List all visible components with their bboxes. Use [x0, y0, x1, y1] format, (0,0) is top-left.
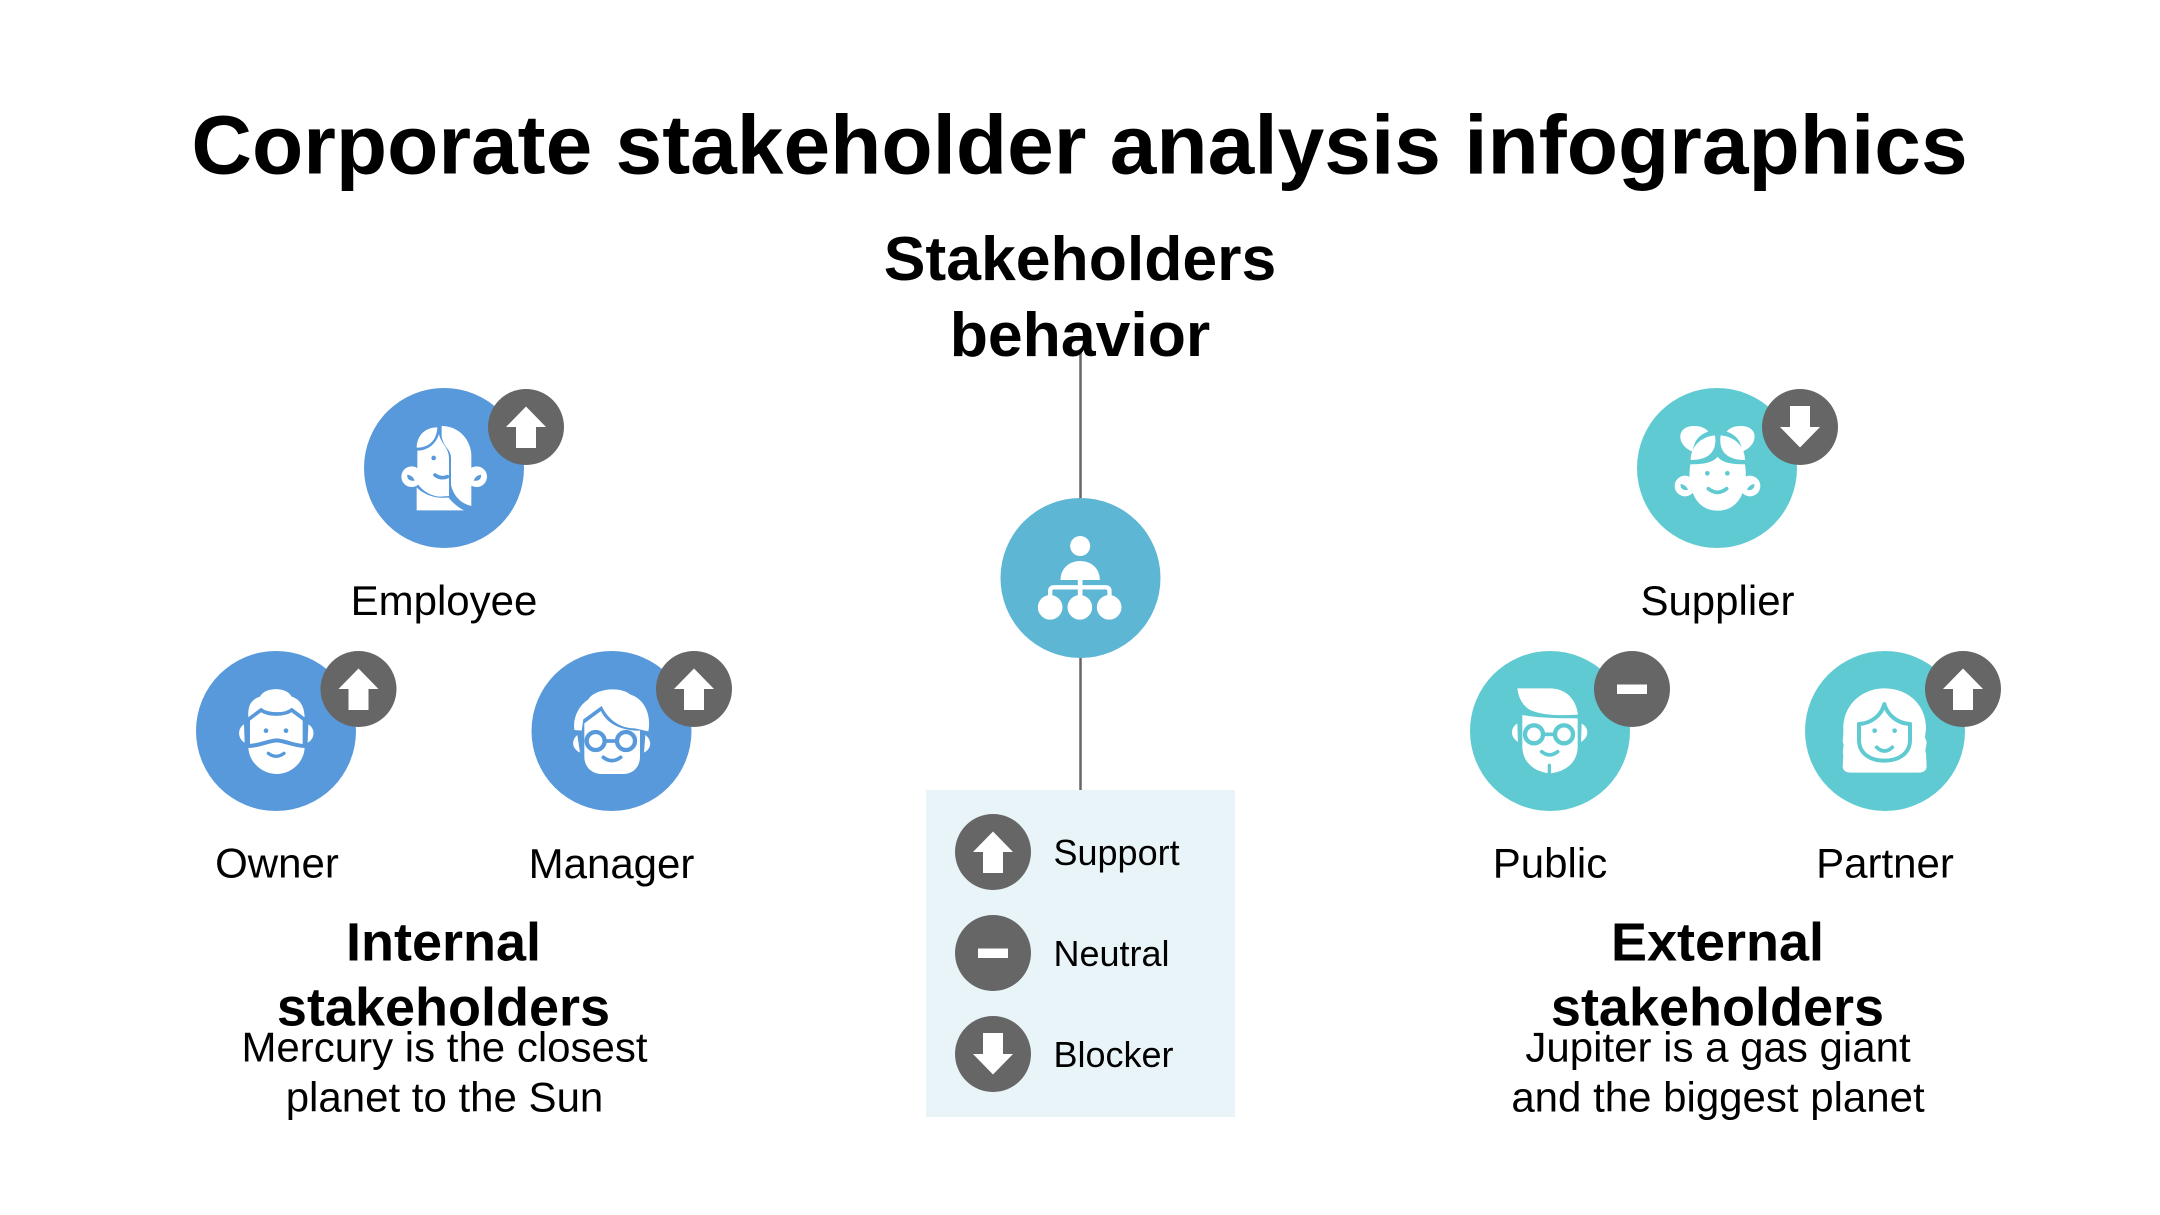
label: supplier: Supplier	[1640, 577, 1795, 624]
label: partner: Partner	[1816, 840, 1954, 886]
icon: owner	[196, 651, 396, 811]
legend item: blocker: Blocker	[1054, 1034, 1174, 1075]
heading: stakeholders behavior	[884, 224, 1276, 370]
text: external description: and the biggest planet	[1511, 1074, 1925, 1120]
icon: supplier	[1637, 388, 1838, 548]
badge: support	[656, 651, 732, 727]
badge: support	[1925, 651, 2001, 727]
heading: external stakeholders: External	[1611, 912, 1824, 972]
text: external description: Jupiter is a gas giant	[1525, 1024, 1911, 1070]
icon: employee	[364, 388, 564, 548]
badge: support	[320, 651, 396, 727]
legend item: support	[955, 814, 1180, 890]
text: internal description	[241, 1024, 648, 1120]
legend item: blocker	[955, 1016, 1174, 1092]
connector line	[1079, 350, 1082, 790]
heading: internal stakeholders: Internal	[346, 912, 541, 972]
legend item: support: Support	[1054, 832, 1180, 873]
heading: stakeholders behavior: Stakeholders	[884, 224, 1276, 294]
text: internal description: Mercury is the closest	[241, 1024, 648, 1070]
heading: internal stakeholders	[277, 912, 610, 1038]
heading: internal stakeholders: stakeholders	[277, 978, 610, 1038]
text: internal description: planet to the Sun	[286, 1074, 603, 1120]
heading: stakeholders behavior: behavior	[950, 300, 1210, 370]
legend item: neutral: Neutral	[1054, 933, 1170, 974]
panel: legend	[926, 790, 1235, 1117]
label: public: Public	[1493, 840, 1607, 886]
heading: external stakeholders	[1551, 912, 1884, 1038]
badge: neutral	[1594, 651, 1670, 727]
icon: public	[1470, 651, 1670, 811]
text: external description	[1511, 1024, 1925, 1120]
badge: blocker	[1762, 389, 1838, 465]
icon: manager	[532, 651, 732, 811]
heading: external stakeholders: stakeholders	[1551, 978, 1884, 1038]
label: manager: Manager	[529, 840, 694, 887]
legend item: neutral	[955, 915, 1170, 991]
label: owner: Owner	[215, 840, 339, 886]
title: Corporate stakeholder analysis infographics	[191, 98, 1968, 192]
icon: central organisation hierarchy	[1000, 498, 1160, 658]
label: employee: Employee	[351, 577, 537, 624]
badge: support	[488, 389, 564, 465]
icon: partner	[1805, 651, 2001, 811]
